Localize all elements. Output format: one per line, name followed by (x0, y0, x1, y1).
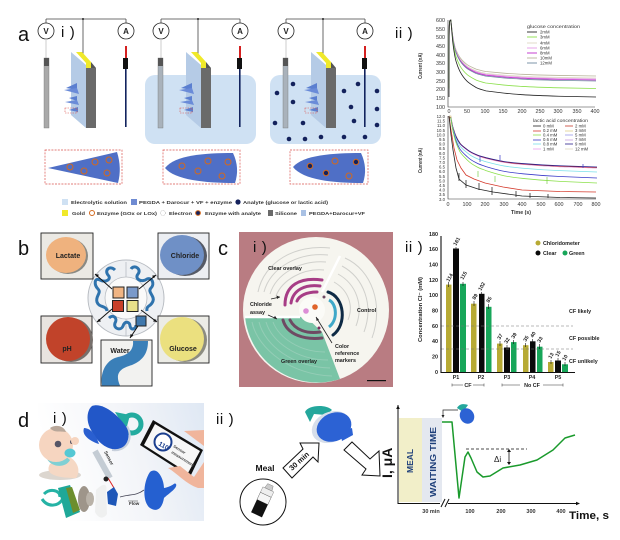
central sensor disc (88, 260, 164, 338)
bar chart: chloride concentration: P5 (555, 375, 561, 381)
chart: current vs glucose concentration: 150 (436, 96, 445, 102)
bar chart: chloride concentration: CF (464, 383, 472, 389)
panel label c: c (218, 238, 228, 260)
panel d sub-label ii: ii ) (216, 411, 234, 428)
chart: current vs glucose concentration: 200 (518, 109, 526, 115)
bar chart: chloride concentration: 140 (429, 263, 438, 269)
arrow: 30 min: 30 min (287, 450, 311, 472)
chart: current vs glucose concentration: 250 (436, 79, 445, 85)
chart: current vs lactic acid concentration: 7.0 (439, 160, 446, 165)
bar chart: chloride concentration: P4 (529, 375, 535, 381)
bar chart: chloride concentration: 115 (460, 271, 469, 281)
chart: current vs glucose concentration: 150 (498, 109, 508, 115)
chart: current vs time after meal: Time, s (569, 510, 609, 522)
chart: current vs lactic acid concentration: 4.0 (439, 188, 446, 193)
chart: current vs glucose concentration: 4mM (540, 40, 550, 46)
chart: current vs lactic acid concentration: 9 mM (575, 142, 586, 146)
legend for panel a: Silicone (275, 211, 298, 216)
chart: current vs glucose concentration: 50 (464, 109, 470, 115)
sweat sensor photo: Control (357, 308, 377, 314)
legend for panel a: Enzyme (GOx or LOx) (97, 211, 158, 216)
chart: current vs glucose concentration: 350 (436, 61, 445, 67)
bar chart: chloride concentration (418, 232, 600, 389)
panel c sub-label ii: ii ) (405, 239, 423, 256)
chart: current vs lactic acid concentration: 3.5 (439, 192, 446, 197)
chart: current vs lactic acid concentration: 300 (500, 202, 508, 208)
chart: current vs lactic acid concentration: 5.5 (439, 174, 446, 179)
sweat sensor photo: Chloride (250, 302, 272, 308)
bar chart: chloride concentration: Clear (543, 251, 557, 257)
tile: lactate (41, 233, 93, 279)
chart: current vs lactic acid concentration: 6.5 (439, 165, 446, 170)
chart: current vs glucose concentration: 3mM (540, 34, 550, 40)
bar chart: chloride concentration: 20 (432, 355, 438, 361)
chart: current vs time after meal (379, 404, 609, 522)
detail: swollen tip in solution (163, 150, 240, 184)
chart: current vs glucose concentration: 350 (572, 109, 582, 115)
chart: current vs glucose concentration: 450 (436, 44, 445, 50)
bar chart: chloride concentration: 32 (504, 337, 512, 345)
chart: current vs lactic acid concentration: 3.0 (439, 197, 446, 202)
chart: current vs lactic acid concentration: 200 (480, 202, 490, 208)
sweat sensor photo: Color (335, 344, 350, 350)
chart: current vs time after meal: WAITING TIME (429, 426, 438, 497)
chart: current vs lactic acid concentration: 400 (518, 202, 526, 208)
tile: chloride (158, 233, 209, 279)
chart: current vs lactic acid concentration: 6.0 (439, 169, 446, 174)
chart: current vs glucose concentration: 2mM (540, 30, 550, 34)
legend for panel a: Analyte (glucose or lactic acid) (243, 200, 329, 205)
chart: current vs glucose concentration: 200 (436, 87, 445, 93)
chart: current vs lactic acid concentration: 5.0 (439, 178, 446, 183)
chart: current vs lactic acid concentration: 7 mM (575, 137, 586, 142)
electrochemical cell: electrolyte solution: V (158, 27, 164, 36)
bar chart: chloride concentration: 89 (472, 293, 480, 301)
chart: current vs glucose concentration: 400 (590, 109, 600, 115)
chart: current vs lactic acid concentration: 5 mM (575, 132, 586, 138)
sweat sensor photo: Green overlay (281, 359, 317, 365)
bar chart: chloride concentration: 85 (486, 296, 494, 304)
bar chart: chloride concentration: Green (569, 251, 585, 257)
tile: glucose: Glucose (169, 346, 197, 353)
icon: smart pacifier (305, 405, 356, 449)
chart: current vs lactic acid concentration: 11.0 (437, 123, 446, 128)
chart: current vs glucose concentration: 300 (436, 70, 445, 76)
bar chart: chloride concentration: No CF (524, 383, 541, 389)
chart: current vs lactic acid concentration: Time (s) (511, 210, 531, 216)
bar chart: chloride concentration: 80 (432, 309, 438, 315)
smart pacifier system illustration: 110 (157, 441, 170, 452)
chart: current vs lactic acid concentration: 10.0 (437, 132, 446, 137)
smart pacifier system illustration: Sensor (103, 450, 115, 466)
chart: current vs glucose concentration: 100 (480, 109, 490, 115)
arrow to chart (344, 442, 380, 476)
chart: current vs lactic acid concentration: 0 mM (543, 124, 554, 128)
smart pacifier system illustration: Flow (129, 501, 140, 506)
chart: current vs lactic acid concentration: 700 (574, 202, 582, 208)
tile: glucose (158, 316, 209, 363)
chart: current vs lactic acid concentration: Current (nA) (418, 148, 424, 173)
chart: current vs lactic acid concentration: 8.5 (439, 146, 446, 151)
chart: current vs time after meal: MEAL (405, 449, 415, 473)
bar chart: chloride concentration: P1 (453, 375, 459, 381)
bar chart: chloride concentration: CF possible (569, 336, 600, 342)
chart: current vs lactic acid concentration: 9.5 (439, 137, 446, 142)
electrochemical cell: bare electrodes (38, 18, 134, 128)
chart: current vs lactic acid concentration: lactic acid concentration (533, 118, 589, 123)
chart: current vs glucose concentration: 12mM (540, 60, 552, 66)
chart: current vs lactic acid concentration: 7.5 (439, 155, 446, 160)
arrow: 30 min (283, 443, 319, 478)
chart: current vs time after meal: 200 (496, 509, 506, 515)
panel label d: d (18, 410, 29, 432)
chart: current vs glucose concentration: 6mM (540, 46, 550, 50)
chart: current vs glucose concentration: 600 (436, 18, 445, 24)
chart: current vs glucose concentration: Current (nA) (418, 53, 424, 79)
sweat sensor photo (239, 232, 393, 387)
chart: current vs glucose concentration: 500 (436, 35, 445, 41)
panel d sub-label i: i ) (53, 410, 67, 427)
icon: baby bottle (240, 479, 286, 525)
chart: current vs lactic acid concentration: 3 mM (575, 128, 586, 133)
chart: current vs lactic acid concentration: 800 (592, 202, 600, 208)
electrochemical cell: solution with analyte (270, 18, 381, 144)
sweat sensor photo: Clear overlay (268, 266, 302, 272)
smart pacifier system illustration (38, 403, 204, 521)
tile: lactate: Lactate (56, 253, 80, 260)
tile: pH: pH (62, 346, 72, 353)
tile: chloride: Chloride (171, 253, 199, 260)
legend for panel a: PEGDA + Darocur + VF + enzyme (139, 200, 233, 205)
chart: current vs lactic acid concentration: 1 mM (543, 146, 554, 152)
smart pacifier system illustration: Sensor (172, 444, 187, 455)
tile: water: Water (110, 348, 130, 355)
meal label: Meal (256, 463, 274, 473)
bar chart: chloride concentration: Chloridometer (543, 241, 581, 247)
chart: current vs lactic acid concentration: 11.5 (437, 119, 446, 124)
chart: current vs lactic acid concentration: 0.4 mM (543, 132, 558, 138)
panel a sub-label ii: ii ) (395, 25, 413, 42)
chart: current vs time after meal: 300 (526, 509, 536, 515)
bar chart: chloride concentration: Concentration Cl⁻ (mM) (418, 277, 424, 342)
chart: current vs lactic acid concentration: 12 mM (575, 146, 589, 152)
chart: current vs glucose concentration (418, 18, 600, 115)
chart: current vs lactic acid concentration: 12.0 (437, 114, 446, 119)
chart: current vs glucose concentration: 400 (436, 53, 445, 59)
bar chart: chloride concentration: CF unlikely (569, 359, 598, 365)
chart: current vs glucose concentration: 10mM (540, 56, 552, 60)
chart: current vs lactic acid concentration: 500 (536, 202, 546, 208)
electrochemical cell: electrolyte solution (145, 18, 256, 144)
chart: current vs lactic acid concentration: 0.2 mM (543, 128, 558, 133)
chart: current vs lactic acid concentration: 10.5 (437, 128, 446, 133)
electrochemical cell: bare electrodes: V (43, 27, 49, 36)
chart: current vs glucose concentration: 8mM (540, 50, 550, 56)
chart: current vs lactic acid concentration: 8.0 (439, 151, 446, 156)
bar chart: chloride concentration: 160 (429, 247, 438, 253)
legend for panel a: Gold (72, 211, 85, 216)
chart: current vs lactic acid concentration (418, 114, 600, 216)
chart: current vs time after meal: 400 (556, 509, 566, 515)
legend for panel a: PEGDA+Darocur+VF (309, 211, 365, 216)
electrochemical cell: solution with analyte: A (362, 27, 368, 36)
bar chart: chloride concentration: 60 (432, 324, 438, 330)
detail: tip with analyte bound (290, 150, 368, 184)
electrochemical cell: electrolyte solution: A (237, 27, 243, 36)
chart: current vs lactic acid concentration: 9.0 (439, 142, 446, 147)
bar chart: chloride concentration: P2 (478, 375, 484, 381)
bar chart: chloride concentration: 100 (429, 293, 438, 299)
chart: current vs time after meal: 100 (465, 509, 475, 515)
legend for panel a: Enzyme with analyte (205, 211, 262, 216)
bar chart: chloride concentration: 15 (555, 350, 563, 358)
detail: tip with enzyme (45, 150, 122, 184)
bar chart: chloride concentration: 39 (511, 332, 519, 340)
bar chart: chloride concentration: 33 (537, 336, 545, 344)
bar chart: chloride concentration: 114 (446, 273, 455, 283)
panel c sub-label i: i ) (253, 239, 267, 256)
chart: current vs glucose concentration: 300 (554, 109, 562, 115)
bar chart: chloride concentration: 102 (478, 281, 487, 292)
chart: current vs time after meal: I, μA (379, 448, 395, 478)
tile: water (101, 340, 152, 386)
chart: current vs lactic acid concentration: 0 (446, 202, 450, 208)
chart: current vs glucose concentration: glucose concentration (527, 24, 581, 29)
chart: current vs lactic acid concentration: 600 (554, 202, 564, 208)
bar chart: chloride concentration: 120 (429, 278, 438, 284)
bar chart: chloride concentration: 0 (435, 370, 438, 376)
bar chart: chloride concentration: 40 (530, 331, 538, 339)
panel label a: a (18, 24, 30, 46)
bar chart: chloride concentration: 40 (432, 339, 438, 345)
panel a sub-label i: i ) (61, 24, 75, 41)
sweat sensor photo: reference (335, 351, 359, 357)
panel label b: b (18, 238, 29, 260)
chart: current vs lactic acid concentration: 4.5 (439, 183, 446, 188)
chart: current vs time after meal: Δi (494, 455, 501, 464)
legend for panel a (62, 199, 365, 216)
legend for panel a: Electron (169, 211, 192, 216)
bar chart: chloride concentration: 13 (548, 352, 556, 360)
bar chart: chloride concentration: 161 (453, 236, 462, 247)
legend for panel a: Electrolytic solution (71, 200, 127, 205)
tile: pH (41, 316, 93, 363)
electrochemical cell: solution with analyte: V (283, 27, 289, 36)
chart: current vs glucose concentration: 250 (536, 109, 544, 115)
chart: current vs time after meal: 30 min (422, 509, 440, 515)
electrochemical cell: bare electrodes: A (123, 27, 129, 36)
chart: current vs glucose concentration: 550 (436, 27, 445, 33)
chart: current vs lactic acid concentration: 100 (462, 202, 472, 208)
chart: current vs lactic acid concentration: 0.8 mM (543, 142, 558, 146)
sweat sensor photo: assay (250, 310, 265, 316)
chart: current vs lactic acid concentration: 2 mM (575, 124, 586, 128)
bar chart: chloride concentration: 35 (523, 335, 531, 343)
sweat sensor photo: markers (335, 358, 356, 364)
bar chart: chloride concentration: 10 (562, 354, 570, 362)
bar chart: chloride concentration: 37 (497, 333, 505, 341)
chart: current vs glucose concentration: 100 (436, 105, 445, 111)
chart: current vs glucose concentration: 0 (448, 109, 450, 115)
bar chart: chloride concentration: CF likely (569, 309, 591, 315)
bar chart: chloride concentration: P3 (504, 375, 510, 381)
bar chart: chloride concentration: 180 (429, 232, 438, 238)
smart pacifier system illustration: measurement (170, 450, 196, 468)
chart: current vs lactic acid concentration: 0.6 mM (543, 137, 558, 142)
